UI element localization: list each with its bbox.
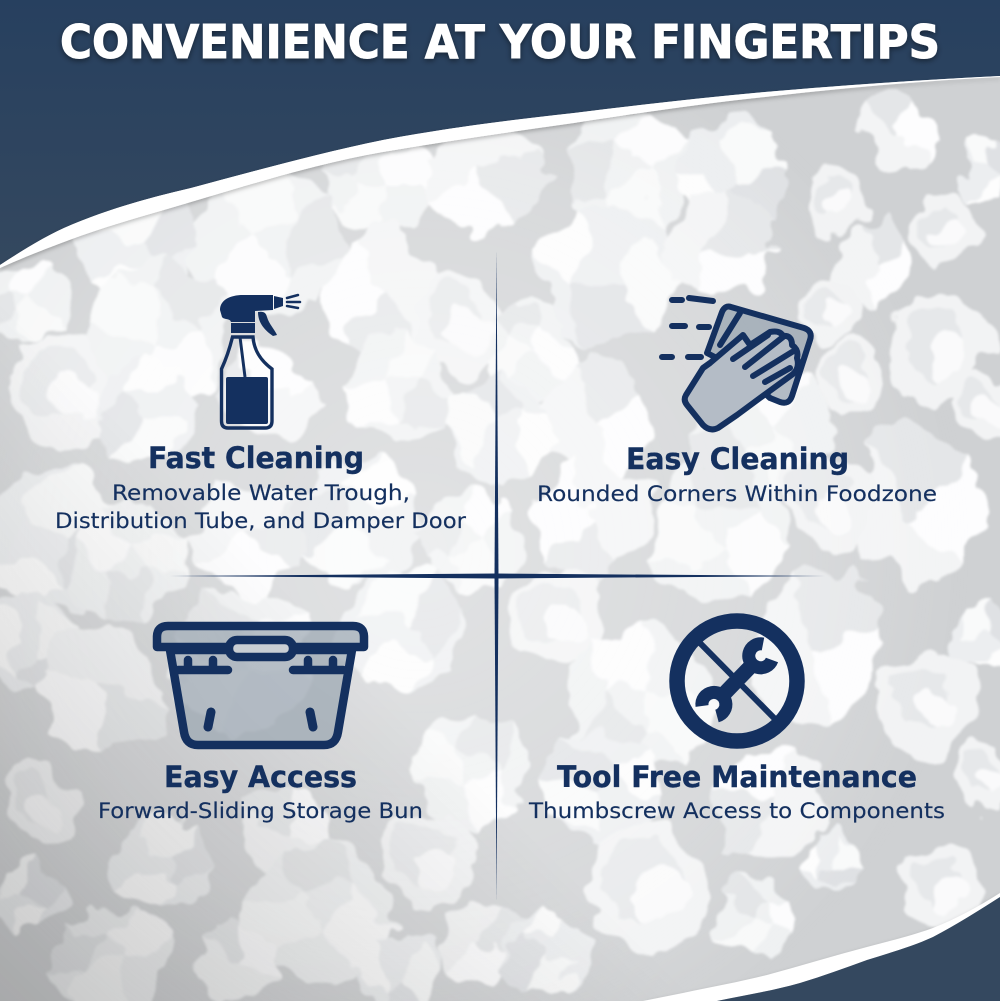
bottom banner swoosh: white edge xyxy=(643,893,1000,1001)
top swoosh: white edge xyxy=(0,76,1000,268)
icon: crossed-out wrench xyxy=(677,621,797,741)
icon: storage bin xyxy=(157,626,364,745)
panel: fast cleaning xyxy=(55,295,466,533)
icon: hand wiping with cloth xyxy=(662,298,811,429)
heading: easy access: Easy Access xyxy=(164,760,357,794)
text: easy cleaning description: Rounded Corners Within Foodzone xyxy=(537,482,937,506)
text: easy access description: Forward-Sliding Storage Bun xyxy=(98,799,423,823)
text: tool free description: Thumbscrew Access to Components xyxy=(528,799,945,823)
icon: spray bottle xyxy=(220,295,300,428)
text: fast cleaning description xyxy=(55,481,466,533)
heading: tool free maintenance: Tool Free Maintenance xyxy=(557,760,917,794)
top banner swoosh: navy xyxy=(0,0,1000,265)
heading: fast cleaning: Fast Cleaning xyxy=(148,441,364,475)
cross divider xyxy=(170,250,825,902)
panel: easy cleaning xyxy=(537,298,937,506)
title: CONVENIENCE AT YOUR FINGERTIPS xyxy=(60,15,940,69)
text: fast cleaning description: Removable Water Trough, xyxy=(112,481,410,505)
panel: tool free maintenance xyxy=(528,621,945,823)
text: fast cleaning description: Distribution Tube, and Damper Door xyxy=(55,509,466,533)
panel: easy access xyxy=(98,626,423,823)
bottom banner swoosh: navy xyxy=(717,897,1000,1001)
heading: easy cleaning: Easy Cleaning xyxy=(626,442,849,476)
